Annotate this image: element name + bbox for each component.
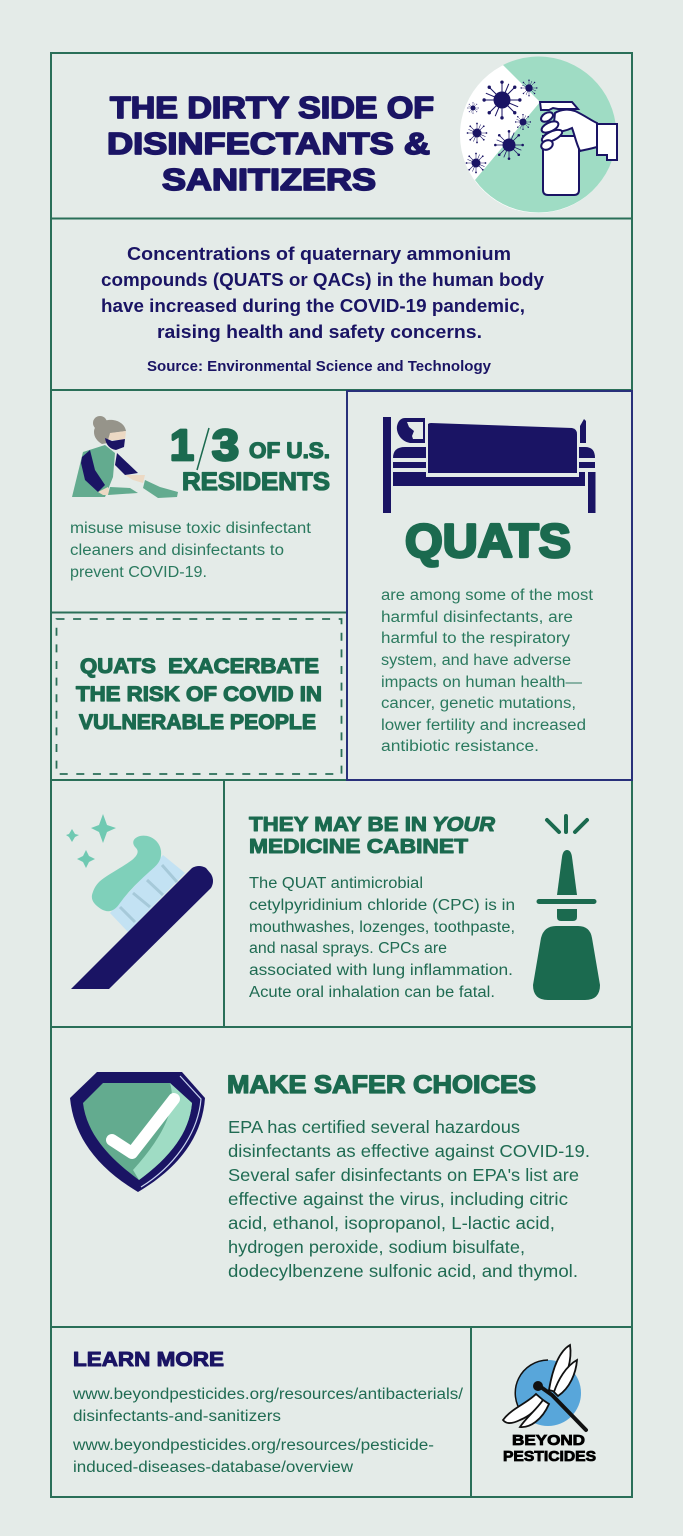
text block: quats harms: lower fertility and increased <box>381 717 586 734</box>
icon: masked woman cleaning <box>72 416 178 498</box>
text block: CPC: cetylpyridinium chloride (CPC) is in <box>249 897 515 914</box>
logo: Beyond Pesticides: BEYOND <box>512 1432 585 1449</box>
text block: quats harms: are among some of the most <box>381 587 594 604</box>
heading: medicine cabinet: THEY MAY BE IN <box>249 814 427 836</box>
title: THE DIRTY SIDE OF <box>110 90 434 125</box>
text block: intro: compounds (QUATS or QACs) in the human body <box>101 269 545 290</box>
stat: 1/3 of U.S. residents: 3 <box>212 421 239 470</box>
text block: links: disinfectants-and-sanitizers <box>73 1408 281 1425</box>
text block: CPC: associated with lung inflammation. <box>249 962 513 979</box>
text block: quats harms: antibiotic resistance. <box>381 738 539 755</box>
callout: dashed box: QUATS EXACERBATE <box>80 655 319 678</box>
text block: intro <box>101 243 545 342</box>
callout: dashed box: VULNERABLE PEOPLE <box>79 711 316 734</box>
text block: quats harms: impacts on human health— <box>381 674 583 691</box>
icon: hospital bed <box>383 417 596 513</box>
heading: medicine cabinet: MEDICINE CABINET <box>249 836 468 858</box>
heading: medicine cabinet <box>249 814 496 858</box>
text block: CPC: and nasal sprays. CPCs are <box>249 940 447 957</box>
text block: misuse: prevent COVID-19. <box>70 564 207 581</box>
stat: 1/3 of U.S. residents: OF U.S. <box>249 438 330 463</box>
text block: quats harms: system, and have adverse <box>381 652 571 669</box>
text block: CPC: Acute oral inhalation can be fatal. <box>249 984 495 1001</box>
text block: intro: raising health and safety concerns. <box>157 321 482 342</box>
text block: safer choices: effective against the virus, including citric <box>228 1189 568 1209</box>
text block: safer choices: acid, ethanol, isopropanol, L-lactic acid, <box>228 1213 555 1233</box>
stat: 1/3 of U.S. residents <box>170 421 330 496</box>
text block: intro: have increased during the COVID-19 pandemic, <box>101 295 525 316</box>
heading: medicine cabinet: YOUR <box>432 814 496 836</box>
callout: dashed box <box>56 619 342 774</box>
text block: safer choices <box>228 1117 590 1281</box>
text block: safer choices: dodecylbenzene sulfonic acid, and thymol. <box>228 1261 578 1281</box>
text block: CPC: The QUAT antimicrobial <box>249 875 423 892</box>
text block: links: www.beyondpesticides.org/resources/antibacterials/ <box>72 1386 464 1403</box>
panel: frame and grid <box>51 53 632 1497</box>
text block: quats harms: harmful to the respiratory <box>381 630 570 647</box>
text block: safer choices: EPA has certified several hazardous <box>228 1117 520 1137</box>
stat: 1/3 of U.S. residents: RESIDENTS <box>182 468 330 496</box>
heading: learn more: LEARN MORE <box>73 1349 224 1371</box>
text block: misuse: cleaners and disinfectants to <box>70 542 284 559</box>
title: SANITIZERS <box>162 162 376 197</box>
text block: intro: Concentrations of quaternary ammonium <box>127 243 511 264</box>
text block: CPC <box>249 875 515 1001</box>
icon: toothbrush <box>66 814 213 989</box>
icon: nasal spray <box>533 816 600 1000</box>
text block: quats harms: harmful disinfectants, are <box>381 609 573 626</box>
callout: dashed box: THE RISK OF COVID IN <box>76 683 322 706</box>
heading: make safer choices: MAKE SAFER CHOICES <box>227 1071 536 1099</box>
source: Source: Environmental Science and Technology <box>147 359 491 375</box>
icon: spray bottle and viruses <box>460 57 617 213</box>
title: DISINFECTANTS & <box>107 126 430 161</box>
text block: misuse: misuse misuse toxic disinfectant <box>70 520 312 537</box>
text block: links: www.beyondpesticides.org/resources/pesticide- <box>72 1437 434 1454</box>
title <box>107 90 434 197</box>
text block: safer choices: Several safer disinfectants on EPA's list are <box>228 1165 579 1185</box>
icon: shield with check <box>70 1072 205 1192</box>
logo: Beyond Pesticides <box>503 1345 596 1465</box>
text block: links: induced-diseases-database/overview <box>73 1459 354 1476</box>
heading: QUATS: QUATS <box>405 514 571 567</box>
text block: quats harms: cancer, genetic mutations, <box>381 695 576 712</box>
text block: safer choices: hydrogen peroxide, sodium bisulfate, <box>228 1237 525 1257</box>
text block: misuse <box>70 520 312 581</box>
text block: CPC: mouthwashes, lozenges, toothpaste, <box>249 919 515 936</box>
text block: safer choices: disinfectants as effective against COVID-19. <box>228 1141 590 1161</box>
stat: 1/3 of U.S. residents: 1 <box>170 421 194 470</box>
text block: quats harms <box>381 587 594 755</box>
text block: links <box>72 1386 464 1476</box>
logo: Beyond Pesticides: PESTICIDES <box>503 1448 596 1465</box>
